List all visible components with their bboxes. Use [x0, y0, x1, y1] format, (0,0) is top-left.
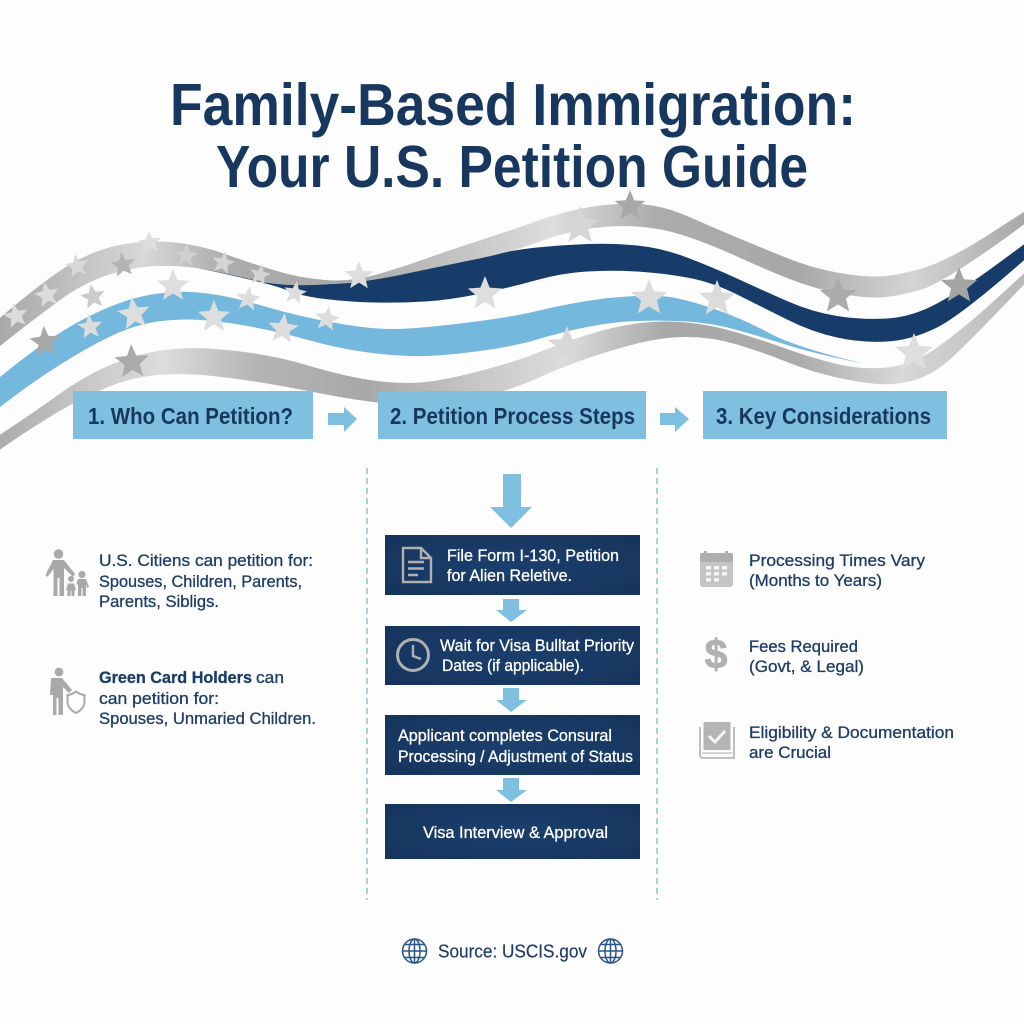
text: green card holders: Green Card Holders [99, 668, 252, 687]
title: Your U.S. Petition Guide [216, 134, 808, 200]
panel: key considerations [700, 551, 954, 762]
text: green card holders: can petition for: [99, 689, 219, 708]
ribbon: lower silver [0, 268, 1024, 453]
text: fees [749, 637, 864, 676]
header: 1. Who Can Petition? [73, 391, 313, 439]
header: 2. Petition Process Steps [378, 391, 646, 439]
text: U.S. citizens: Parents, Sibligs. [99, 592, 219, 611]
step: visa interview: Visa Interview & Approval [423, 823, 608, 842]
arrow: step 1 to step 2 [328, 407, 357, 432]
header: 1. Who Can Petition?: 1. Who Can Petition? [88, 403, 293, 429]
step: consular processing [385, 715, 640, 775]
header: 3. Key Considerations [703, 391, 947, 439]
text: fees: Fees Required [749, 637, 858, 656]
icon: dollar sign: $ [705, 631, 728, 677]
text: eligibility [749, 723, 954, 762]
text: green card holders [99, 668, 316, 728]
arrow: down to step one [490, 474, 532, 528]
step: wait for visa bulletin: Dates (if applicable). [442, 656, 584, 675]
text: U.S. citizens: U.S. Citiens can petition for: [99, 551, 313, 570]
title: Family-Based Immigration: [170, 72, 856, 138]
text: eligibility: Eligibility & Documentation [749, 723, 954, 742]
arrow: down to step four [496, 778, 527, 802]
text: processing times: Processing Times Vary [749, 551, 926, 570]
icon: person with shield [50, 668, 84, 715]
text: green card holders: can [256, 668, 284, 687]
stars [1, 190, 977, 377]
text: U.S. citizens [99, 551, 313, 611]
step: consular processing: Applicant completes Consural [398, 726, 612, 745]
title [170, 72, 856, 200]
text: green card holders: Spouses, Unmaried Children. [99, 709, 316, 728]
step: wait for visa bulletin [385, 626, 640, 685]
source text: Source: USCIS.gov [438, 940, 588, 962]
text: fees: (Govt, & Legal) [749, 657, 864, 676]
icon: checklist [700, 722, 734, 758]
header: 3. Key Considerations: 3. Key Considerations [716, 403, 931, 429]
header: 2. Petition Process Steps: 2. Petition Process Steps [390, 403, 635, 429]
arrow: down to step two [496, 599, 527, 622]
step: file form I-130: File Form I-130, Petition [447, 546, 619, 565]
icon: globe left [402, 939, 426, 963]
arrow: down to step three [496, 688, 527, 712]
icon: globe right [598, 939, 622, 963]
source footer [402, 939, 622, 963]
text: U.S. citizens: Spouses, Children, Parents, [99, 572, 302, 591]
ribbon: upper silver [0, 204, 1024, 350]
arrow: step 2 to step 3 [660, 407, 689, 432]
step: file form I-130: for Alien Reletive. [447, 566, 572, 585]
icon: calendar [700, 551, 733, 587]
step: visa interview [385, 804, 640, 859]
text: processing times [749, 551, 926, 590]
step: file form I-130 [385, 535, 640, 595]
text: processing times: (Months to Years) [749, 571, 882, 590]
text: eligibility: are Crucial [749, 743, 831, 762]
icon: family [46, 549, 89, 596]
ribbon: navy [183, 240, 1024, 342]
panel: petition process steps [385, 474, 640, 859]
column divider lines [367, 468, 657, 900]
step: consular processing: Processing / Adjustment of Status [398, 747, 633, 766]
step: wait for visa bulletin: Wait for Visa Bulltat Priority [440, 636, 634, 655]
waving flag ribbons with stars [0, 190, 1024, 453]
panel: who can petition [46, 549, 316, 728]
ribbon: light blue [0, 292, 865, 411]
